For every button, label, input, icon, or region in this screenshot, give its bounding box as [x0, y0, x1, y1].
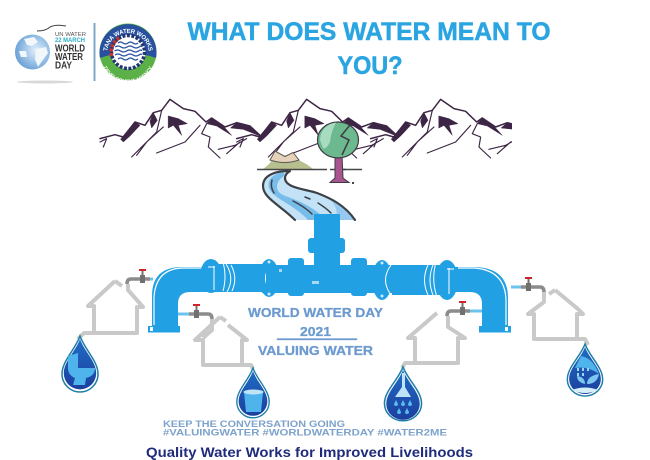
drop: plant and rain [567, 344, 603, 396]
drop: shower [384, 367, 422, 421]
World Water Day wordmark: DAY [55, 60, 72, 72]
World Water Day wordmark: WORLD [55, 42, 85, 54]
hashtag text: #VALUINGWATER #WORLDWATERDAY #WATER2ME [163, 428, 447, 438]
house pipe 1 with tap [78, 269, 153, 339]
right elbow [392, 260, 511, 332]
tagline: Quality Water Works for Improved Livelihoods [146, 445, 473, 460]
landscape: bush and ground [257, 151, 362, 170]
house pipe 4 with tap [511, 277, 588, 345]
agency name on ring: TANA WATER WORKS [103, 28, 153, 51]
title [188, 18, 550, 80]
caption: year: 2021 [300, 324, 331, 339]
agency descriptor on ring: DEVELOPMENT AGENCY [104, 66, 152, 80]
vertical riser [308, 214, 345, 274]
logo: Tana Water Works Development Agency [100, 24, 156, 80]
house pipe 2 with tap [178, 304, 253, 369]
caption: theme: VALUING WATER [258, 343, 374, 358]
mountain range [100, 99, 531, 158]
logo: UN Water World Water Day [15, 25, 86, 84]
caption: event name: WORLD WATER DAY [248, 305, 383, 320]
river [263, 171, 355, 220]
hashtag text: KEEP THE CONVERSATION GOING [163, 419, 345, 429]
title: YOU? [338, 52, 402, 80]
drop: glass of water [237, 368, 269, 418]
horizontal centre section [259, 258, 392, 300]
globe icon [15, 25, 73, 84]
title: WHAT DOES WATER MEAN TO [188, 18, 550, 46]
drop: toilet [62, 336, 98, 392]
house pipe 3 with tap [402, 301, 482, 368]
logo divider [94, 23, 96, 81]
left elbow [148, 259, 265, 332]
World Water Day wordmark: WATER [55, 51, 83, 63]
hashtag text [163, 419, 447, 438]
tree [318, 122, 358, 184]
date: 22 MARCH [55, 37, 85, 44]
UN Water wordmark: UN WATER [55, 32, 86, 38]
main water pipe [148, 214, 511, 332]
centre caption [248, 305, 383, 358]
World Water Day wordmark [55, 42, 85, 72]
